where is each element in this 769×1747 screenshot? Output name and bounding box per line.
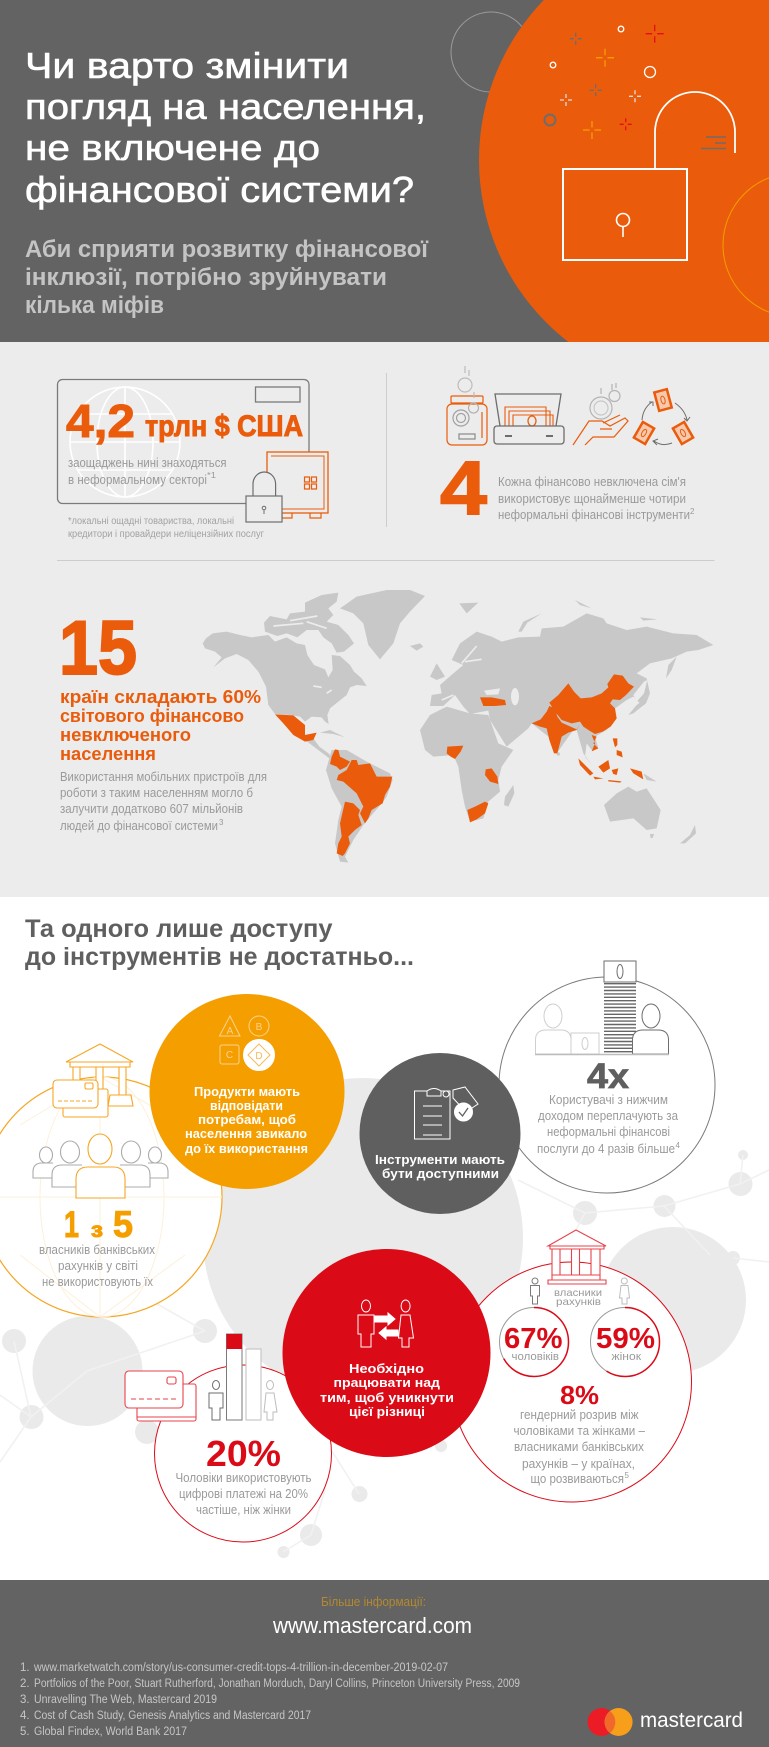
subtitle (25, 236, 429, 319)
website: www.mastercard.com (272, 1613, 472, 1638)
panel: gender gap red circle (282, 1249, 490, 1457)
world map (203, 590, 713, 863)
icon: jar with coins (447, 366, 487, 445)
highlighted countries: asia, africa (447, 674, 643, 822)
orange subheading: країн складають 60% (60, 686, 261, 707)
references: Portfolios of the Poor, Stuart Rutherford, Jonathan Morduch, Daryl Collins, Princeton University Press, 2009 (34, 1678, 520, 1690)
description (514, 1408, 645, 1486)
subtitle: Аби сприяти розвитку фінансової (25, 236, 429, 263)
description: що розвиваються (530, 1472, 624, 1486)
icon: A B C D options: D (255, 1051, 263, 1062)
description: Використання мобільних пристроїв для (60, 770, 267, 784)
description: людей до фінансової системи (60, 819, 218, 833)
label: account owners: власники (554, 1287, 602, 1299)
chart: 67 percent men ring: 67% (504, 1323, 563, 1355)
section heading: до інструментів не достатньо... (25, 943, 414, 971)
header panel (0, 0, 769, 342)
description (60, 770, 267, 833)
label text: відповідати (210, 1099, 283, 1113)
icon: bank and cards (53, 1044, 133, 1117)
description: заощаджень нині знаходяться (68, 456, 226, 470)
references (20, 1662, 520, 1738)
outline circle decoration (451, 12, 531, 92)
title: погляд на населення, (25, 86, 426, 127)
label text: населення звикало (185, 1127, 307, 1141)
chart: 59 percent women ring (590, 1308, 660, 1376)
icon: sparkles (544, 25, 664, 139)
stat: 8%: 8% (560, 1380, 599, 1410)
references: Cost of Cash Study, Genesis Analytics and Mastercard 2017 (34, 1710, 311, 1722)
references: Unravelling The Web, Mastercard 2019 (34, 1694, 217, 1706)
description: рахунків у світі (58, 1259, 138, 1273)
icon: hand with coins (573, 383, 628, 445)
orange semicircle (479, 0, 769, 342)
label text: Інструменти мають (375, 1153, 505, 1167)
panel: accessible tools dark circle (360, 1053, 520, 1214)
references: 5. (20, 1726, 30, 1738)
description: використовує щонайменше чотири (498, 492, 686, 506)
chart: 67 percent men ring (500, 1308, 568, 1376)
orange subheading: невключеного (60, 724, 191, 745)
label text (320, 1361, 454, 1419)
icon: clipboard and price tag (414, 1087, 478, 1139)
description: рахунків – у країнах, (522, 1457, 635, 1471)
icon: open padlock (563, 92, 735, 260)
description: в неформальному секторі (68, 473, 207, 487)
description: гендерний розрив між (520, 1408, 639, 1422)
references: 3. (20, 1694, 30, 1706)
stat: 4,2 trillion (66, 395, 303, 447)
more information label: Більше інформації: (321, 1595, 426, 1609)
section heading: Та одного лише доступу (25, 915, 333, 943)
icon: A B C D options: B (256, 1022, 263, 1033)
stat: 15: 15 (59, 606, 137, 691)
icon: bank cards (125, 1371, 196, 1421)
map: eurasia, africa, australia (420, 600, 713, 843)
panel: digital payments circle (125, 1334, 332, 1542)
references: 1. (20, 1662, 30, 1674)
label text: бути доступними (382, 1167, 499, 1181)
card with 4.2 trillion stat (58, 380, 328, 540)
icon: people and money stacks (535, 961, 669, 1054)
label text (375, 1153, 505, 1181)
stat: 4x: 4x (587, 1057, 630, 1096)
icon: bar comparison (226, 1334, 261, 1420)
15 countries stat (59, 606, 267, 833)
panel: footer (0, 1580, 769, 1747)
label text: працювати над (334, 1375, 441, 1390)
description: власниками банківських (514, 1440, 645, 1454)
panel: products amber circle (150, 994, 344, 1189)
icon: bank (548, 1230, 606, 1284)
description: чоловіками та жінками – (514, 1424, 645, 1438)
description: залучити додатково 607 мільйонів (60, 802, 243, 816)
description (68, 456, 226, 487)
icon: A B C D options: A (227, 1026, 234, 1037)
icon: briefcase with cash (494, 394, 564, 444)
icon: man and woman (209, 1380, 277, 1420)
divider lines (57, 373, 714, 560)
panel: 1 in 5 circle (0, 1044, 222, 1317)
label text: цієї різниці (349, 1404, 425, 1419)
title: Чи варто змінити (25, 45, 349, 86)
description: неформальні фінансові (547, 1125, 670, 1139)
description (176, 1471, 312, 1517)
section heading (25, 915, 414, 971)
title: фінансової системи? (25, 169, 414, 210)
description: 5 (624, 1471, 630, 1480)
description: цифрові платежі на 20% (179, 1487, 308, 1501)
orange subheading: світового фінансово (60, 705, 244, 726)
informal instruments block (440, 366, 695, 531)
footnote: кредитори і провайдери неліцензійних послуг (68, 529, 264, 540)
panel: light grey myths section (0, 342, 769, 897)
stat: 4,2 trillion: 4,2 (66, 395, 135, 447)
description: не використовують їх (42, 1275, 154, 1289)
chart: 67 percent men ring: чоловіків (512, 1351, 559, 1363)
label: account owners: рахунків (556, 1296, 601, 1308)
description: Кожна фінансово невключена сім'я (498, 475, 686, 489)
description: доходом переплачують за (538, 1109, 678, 1123)
description: Користувачі з нижчим (549, 1093, 668, 1107)
stat: 4: 4 (440, 446, 487, 531)
description (537, 1093, 680, 1156)
description: послуги до 4 разів більше (537, 1142, 675, 1156)
label text (185, 1085, 308, 1156)
icon: people exchanging (358, 1300, 414, 1347)
icon: card and globe (58, 380, 309, 504)
subtitle: інклюзії, потрібно зруйнувати (25, 264, 387, 291)
faint globe lines (0, 1077, 222, 1317)
orange subheading (60, 686, 261, 764)
icon: group of people (33, 1134, 168, 1198)
label text: потребам, щоб (198, 1113, 296, 1127)
description: власників банківських (39, 1243, 156, 1257)
icon: A B C D options: C (226, 1050, 233, 1061)
panel: account owners circle (452, 1230, 692, 1502)
title: не включене до (25, 127, 320, 168)
references: 2. (20, 1678, 30, 1690)
highlighted countries: americas (275, 714, 392, 856)
stat: 1 in 5: з (91, 1219, 103, 1242)
description: роботи з таким населенням могло б (60, 786, 253, 800)
description: Чоловіки використовують (176, 1471, 312, 1485)
description (39, 1243, 156, 1289)
icon: money cycle (634, 389, 693, 445)
stat: 1 in 5: 5 (113, 1204, 133, 1245)
description (498, 475, 695, 522)
orange subheading: населення (60, 743, 156, 764)
footnote (68, 516, 264, 540)
description: 3 (219, 818, 224, 827)
footnote: *локальні ощадні товариства, локальні (68, 516, 234, 527)
description: частіше, ніж жінки (196, 1503, 291, 1517)
references: www.marketwatch.com/story/us-consumer-credit-tops-4-trillion-in-december-2019-02-07 (33, 1662, 448, 1674)
map: americas (203, 590, 425, 863)
stat: 1 in 5: 1 (64, 1204, 79, 1245)
chart: 59 percent women ring: жінок (612, 1351, 641, 1363)
mastercard logo (588, 1708, 743, 1736)
description: 4 (676, 1141, 680, 1150)
label text: Продукти мають (194, 1085, 300, 1099)
icon: small man and woman (530, 1278, 630, 1304)
label text: до їх використання (185, 1142, 308, 1156)
panel: access section background network (0, 1078, 769, 1558)
description: 2 (690, 507, 695, 516)
references: 4. (20, 1710, 30, 1722)
label text: Необхідно (349, 1361, 424, 1376)
label text: тим, щоб уникнути (320, 1390, 454, 1405)
references: Global Findex, World Bank 2017 (34, 1726, 187, 1738)
subtitle: кілька міфів (25, 292, 164, 319)
icon: A B C D options (220, 1016, 274, 1070)
chart: 59 percent women ring: 59% (596, 1323, 655, 1355)
title (25, 45, 426, 210)
label: account owners (554, 1287, 602, 1308)
description: неформальні фінансові інструменти (498, 508, 690, 522)
icon: safe and lock (246, 452, 328, 522)
panel: 4x overpayment circle (499, 961, 715, 1193)
stat: 20%: 20% (206, 1433, 281, 1474)
stat: 1 in 5 (64, 1204, 133, 1245)
mastercard logo: mastercard (640, 1709, 743, 1732)
stat: 4,2 trillion: трлн $ США (145, 410, 303, 443)
description: *1 (207, 471, 217, 480)
